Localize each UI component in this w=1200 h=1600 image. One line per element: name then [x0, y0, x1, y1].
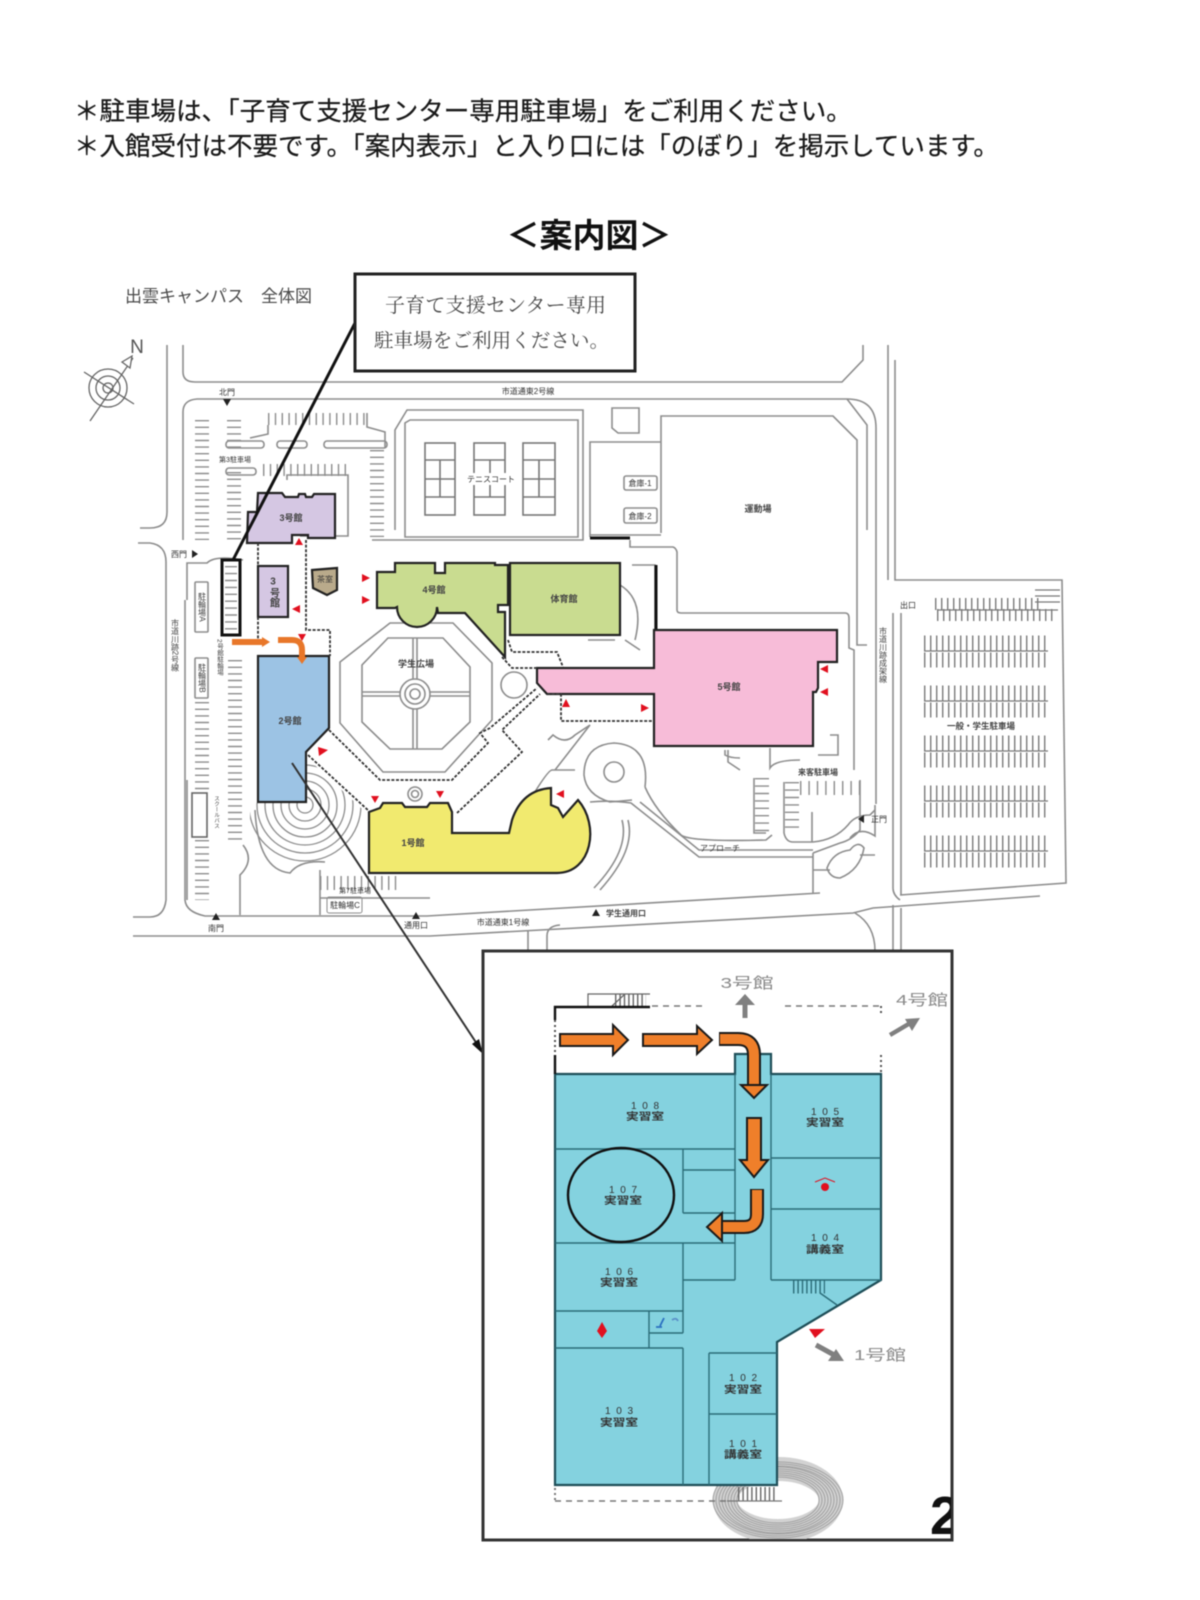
room 107 circle: [568, 1148, 674, 1242]
room labels: 106: [605, 1267, 633, 1278]
labels: buildings: 茶室: [317, 574, 333, 584]
labels: field and storage: 倉庫-2: [628, 511, 652, 521]
site labels: 駐輪場C: [330, 900, 360, 910]
grey direction arrows and labels: 1号館: [854, 1347, 906, 1364]
room labels: 103: [605, 1406, 633, 1417]
room labels: 105: [811, 1107, 839, 1118]
labels: buildings: 3号館: [268, 576, 280, 608]
site labels: 学生通用口: [606, 908, 646, 918]
building: No.1 hall: [369, 788, 590, 873]
room labels: 講義室: [806, 1243, 844, 1256]
leader arrow to floor plan: [292, 763, 483, 1054]
label: tennis court: テニスコート: [467, 475, 515, 484]
roundabout and approach: [530, 725, 875, 878]
site labels: 来客駐車場: [798, 767, 838, 777]
site labels: 西門: [171, 550, 187, 559]
boundary lines: [555, 1006, 882, 1501]
site labels: 出口: [900, 600, 916, 610]
site labels: 南門: [208, 923, 224, 933]
room labels: 実習室: [604, 1194, 642, 1207]
room partitions: [555, 1074, 881, 1485]
room labels: 実習室: [600, 1416, 638, 1429]
building: No.5 hall: [537, 630, 837, 746]
campus map: [133, 345, 1066, 951]
ripple garden: [249, 764, 362, 862]
site labels: 2号館駐輪場: [216, 639, 224, 676]
site labels: 一般・学生駐車場: [947, 721, 1015, 731]
site labels: 第3駐車場: [219, 455, 251, 464]
site labels: 駐輪場A: [198, 591, 206, 622]
room labels: 実習室: [806, 1116, 844, 1129]
black walls: [590, 538, 656, 630]
site labels: 北門: [219, 388, 235, 397]
callout leader line: [233, 323, 355, 560]
room labels: 101: [729, 1439, 757, 1450]
campus heading: 出雲キャンパス 全体図: [125, 287, 312, 306]
icon: entrance: [809, 1329, 825, 1338]
room labels: 102: [729, 1373, 757, 1384]
room labels: [600, 1101, 844, 1461]
site labels: 第7駐車場: [339, 886, 371, 895]
site labels: 市道川跡2号線: [170, 618, 180, 672]
notes text block: [74, 98, 999, 161]
roads: [133, 345, 1066, 951]
site labels: 市道川跡成架線: [878, 626, 888, 684]
site labels: 駐輪場B: [198, 662, 206, 693]
stairs: [588, 994, 825, 1494]
building: No.4 hall: [377, 563, 508, 657]
orange route arrows: [560, 1025, 768, 1241]
site labels: 市道通東1号線: [477, 917, 529, 927]
room labels: 実習室: [626, 1110, 664, 1123]
building: No.2 hall: [258, 656, 329, 802]
icon: restroom: [656, 1318, 678, 1327]
site labels: [170, 386, 1015, 933]
notes text block: ＊入館受付は不要です。「案内表示」と入り口には「のぼり」を掲示しています。: [74, 133, 999, 161]
site labels: アプローチ: [700, 844, 740, 853]
building: No.3 annex: [258, 566, 288, 617]
site labels: スクールバス: [213, 795, 220, 829]
parking highlight rectangle: [222, 560, 240, 635]
callout: parking notice: 駐車場をご利用ください。: [373, 329, 609, 352]
icon: red stair mark: [597, 1178, 835, 1338]
stair ring: [713, 1462, 843, 1538]
room labels: 実習室: [600, 1276, 638, 1289]
site labels: 正門: [871, 815, 887, 824]
labels: field and storage: [628, 478, 772, 521]
field and storage: [588, 408, 867, 770]
grey direction arrows and labels: 4号館: [896, 992, 948, 1009]
parking stripes west: [202, 419, 398, 900]
page number: 2: [930, 1486, 960, 1546]
building: tea room: [312, 568, 337, 595]
room labels: 実習室: [724, 1383, 762, 1396]
site labels: 市道通東2号線: [502, 386, 554, 396]
building: No.3 hall: [247, 493, 335, 543]
parking east service: [762, 778, 860, 833]
tennis courts: [372, 410, 583, 540]
callout: parking notice: [355, 274, 635, 371]
grey direction arrows and labels: 3号館: [720, 975, 774, 992]
notes text block: ＊駐車場は、「子育て支援センター専用駐車場」をご利用ください。: [74, 98, 852, 126]
labels: buildings: 2号館: [278, 716, 302, 726]
student plaza: [340, 623, 527, 801]
room labels: 講義室: [724, 1448, 762, 1461]
label: student plaza: 学生広場: [398, 658, 434, 669]
entrance markers: [292, 538, 828, 803]
title: ＜案内図＞: [506, 217, 672, 254]
building: gymnasium: [510, 563, 620, 635]
labels: buildings: 3号館: [279, 513, 303, 523]
site labels: 通用口: [404, 920, 428, 930]
room labels: 104: [811, 1233, 839, 1244]
covered walkways: [258, 540, 654, 813]
inset: floor plan of No.2 hall: [483, 951, 960, 1546]
labels: buildings: 体育館: [550, 593, 578, 604]
labels: field and storage: 運動場: [744, 503, 772, 514]
grey direction arrows and labels: [720, 975, 948, 1364]
parking lot rows: [924, 590, 1060, 860]
labels: buildings: 5号館: [717, 682, 741, 692]
labels: buildings: 1号館: [401, 838, 425, 848]
room labels: 107: [609, 1185, 637, 1196]
floor outline: [555, 1054, 881, 1485]
labels: buildings: [268, 513, 741, 848]
arrow: route into No.2 hall: [232, 637, 307, 664]
room labels: 108: [631, 1101, 659, 1112]
labels: buildings: 4号館: [422, 585, 446, 595]
labels: field and storage: 倉庫-1: [628, 478, 652, 488]
icon: compass: [84, 337, 144, 421]
callout: parking notice: 子育て支援センター専用: [385, 294, 606, 317]
icon: compass: N: [130, 337, 144, 358]
